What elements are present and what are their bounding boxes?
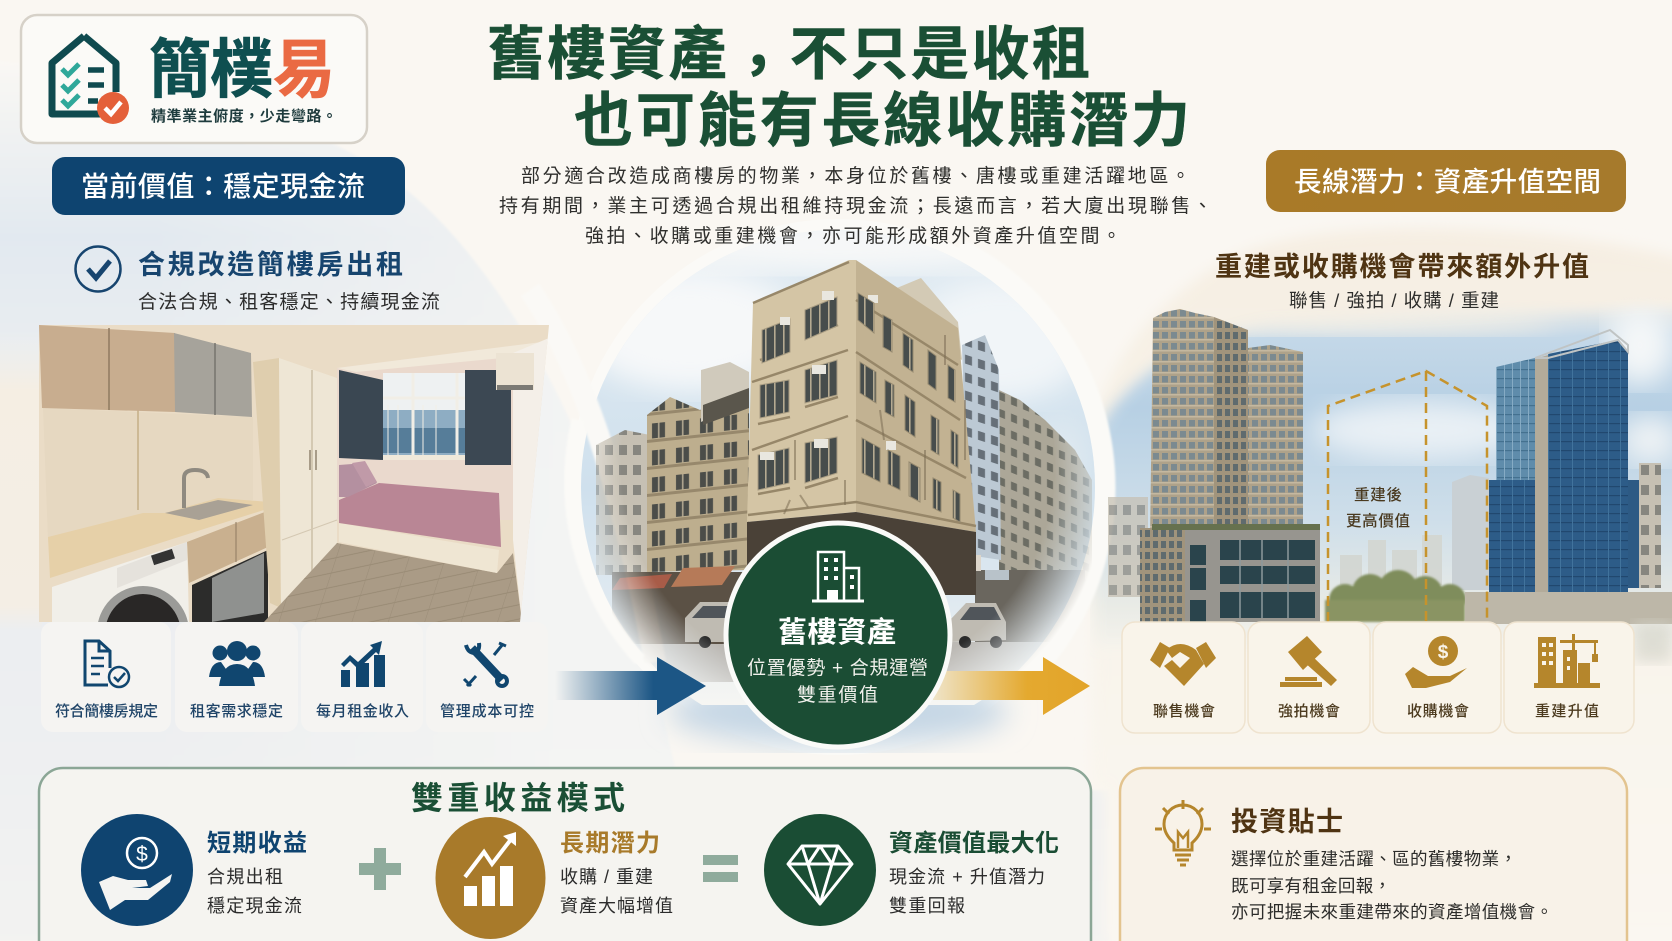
arrow: blue to centre: [555, 657, 706, 715]
card: rent: [301, 622, 423, 732]
logo icon: [52, 36, 129, 124]
centre green circle: [726, 523, 950, 747]
haze strip right of cards: [1634, 622, 1672, 662]
car left: [685, 602, 730, 648]
centre text: 位置優勢 + 合規運營: [747, 657, 928, 679]
card: rebuild value: 重建升值: [1535, 702, 1599, 720]
card: cost: 管理成本可控: [440, 702, 534, 720]
text: long term potential: [560, 830, 673, 916]
curved white band from left panel: [530, 290, 655, 662]
side windows: [858, 293, 960, 522]
right sky backdrop: [1090, 300, 1672, 660]
text: long term potential: 資產大幅增值: [560, 896, 673, 916]
text: long term potential: 長期潛力: [560, 830, 660, 857]
centre heading: 舊樓資產: [778, 616, 896, 649]
tips heading: 投資貼士: [1231, 807, 1343, 837]
heading: compliant rental: [76, 246, 440, 313]
tips text: [1231, 849, 1553, 922]
heading: redevelopment: 聯售 / 強拍 / 收購 / 重建: [1289, 290, 1499, 311]
icon: light bulb: [1155, 800, 1211, 865]
icon: building: [812, 552, 864, 601]
icon: long term potential: [436, 817, 546, 939]
panel heading: 雙重收益模式: [411, 780, 625, 816]
icon: diamond: [764, 814, 876, 926]
card: en bloc sale: 聯售機會: [1153, 703, 1215, 720]
white ring around building: [570, 219, 1106, 755]
card: regulation: 符合簡樓房規定: [55, 702, 158, 720]
ring arc left of building: [571, 420, 640, 660]
heading: redevelopment: [1215, 252, 1589, 311]
card: en bloc sale: [1122, 622, 1245, 733]
ground floor: [747, 512, 976, 595]
icon: check circle: [76, 246, 120, 292]
riverside ground: [1465, 592, 1672, 624]
city photo: [1108, 309, 1672, 662]
text: short term income: [207, 830, 307, 916]
curtains: [339, 370, 383, 460]
right beige background panel: [1090, 228, 1672, 941]
icon: short term income: [81, 814, 193, 926]
dashed future building outline: [1328, 371, 1487, 622]
icon: short term income: $: [136, 843, 148, 866]
brand name: 簡樸易: [149, 34, 335, 106]
title: 不只是收租: [790, 22, 1090, 87]
card: acquisition: $: [1438, 642, 1449, 663]
left feature cards: [41, 622, 548, 732]
tips text: 既可享有租金回報，: [1231, 876, 1391, 896]
left shop building: [647, 385, 749, 572]
pill: current value: [52, 157, 405, 215]
soft blue halo under centre circle: [668, 678, 1008, 746]
card: rebuild value: [1504, 622, 1634, 733]
main building side face: [856, 260, 976, 532]
label: future value: [1346, 486, 1410, 530]
text: short term income: 合規出租: [207, 867, 283, 887]
card: rent: 每月租金收入: [316, 702, 409, 720]
countertop: [48, 498, 270, 578]
plus sign: [359, 848, 401, 890]
title: [487, 22, 1190, 154]
podium building: [1152, 527, 1320, 622]
text: short term income: 穩定現金流: [207, 896, 302, 916]
stains: [784, 335, 965, 514]
panel: investment tips: [1120, 768, 1627, 941]
card: tenants: [175, 622, 298, 732]
alcove wall: [337, 342, 542, 520]
panel: dual income model: [39, 768, 1091, 941]
title: 也可能有長線收購潛力: [574, 88, 1190, 154]
right wall: [513, 338, 549, 622]
title: ，: [729, 34, 787, 99]
pill: long term potential: [1266, 150, 1626, 212]
intro text: [499, 165, 1212, 247]
pill: long term potential: 長線潛力：資產升值空間: [1294, 166, 1601, 197]
air conditioners: [760, 291, 896, 460]
washing machine: [52, 542, 189, 622]
main building front face: [747, 260, 856, 522]
awning left: [671, 566, 735, 587]
tagline: 精準業主俯度，少走彎路。: [151, 107, 337, 125]
wardrobe: [253, 358, 281, 608]
card: compulsory sale: 強拍機會: [1278, 703, 1340, 720]
tips text: 選擇位於重建活躍、區的舊樓物業，: [1231, 849, 1517, 869]
ring arc right of building: [960, 245, 1109, 680]
card: tenants: 租客需求穩定: [190, 702, 283, 720]
heading: redevelopment: 重建或收購機會帶來額外升值: [1215, 252, 1589, 282]
bed: [339, 523, 499, 573]
small right building: [1639, 463, 1661, 588]
text: maximise value: 雙重回報: [889, 896, 965, 916]
room photo: [39, 325, 549, 622]
window: [383, 373, 465, 410]
street: [638, 642, 1040, 682]
card: acquisition: [1373, 622, 1501, 733]
far right buildings: [999, 390, 1092, 590]
distant buildings: [1108, 497, 1148, 597]
blue grey building: [962, 335, 1001, 560]
front windows: [758, 297, 837, 490]
equals sign: [703, 855, 738, 882]
text: maximise value: 現金流 + 升值潛力: [889, 867, 1045, 887]
intro text: 部分適合改造成商樓房的物業，本身位於舊樓、唐樓或重建活躍地區。: [521, 165, 1190, 187]
left tall tower: [1140, 309, 1303, 622]
left blue background panel: [0, 60, 1110, 941]
tips text: 亦可把握未來重建帶來的資產增值機會。: [1231, 902, 1553, 922]
intro text: 強拍、收購或重建機會，亦可能形成額外資產升值空間。: [585, 225, 1121, 247]
ledges: [748, 262, 976, 526]
heading: compliant rental: 合法合規、租客穩定、持續現金流: [138, 291, 440, 313]
air conditioner: [496, 353, 534, 390]
heading: compliant rental: 合規改造簡樓房出租: [138, 250, 403, 280]
old tenement buildings photo: [596, 260, 1092, 682]
car right: [950, 603, 1006, 648]
pill: current value: 當前價值：穩定現金流: [81, 171, 365, 202]
shop sign right: [976, 555, 981, 571]
text: long term potential: 收購 / 重建: [560, 867, 653, 887]
text: maximise value: [889, 829, 1059, 916]
label: future value: 更高價值: [1346, 512, 1410, 530]
centre green circle: 雙重價值: [797, 684, 878, 706]
rear top block: [892, 278, 962, 360]
intro text: 持有期間，業主可透過合規出租維持現金流；長遠而言，若大廈出現聯售、: [499, 195, 1212, 217]
kitchen backsplash: [43, 408, 253, 540]
lower cabinets: [187, 510, 270, 583]
card: compulsory sale: [1248, 622, 1370, 733]
text: short term income: 短期收益: [207, 830, 307, 857]
shops row: [612, 572, 750, 644]
card: cost: [426, 622, 548, 732]
logo card: [21, 15, 367, 143]
arrow: gold from centre: [933, 657, 1090, 715]
floor: [264, 543, 522, 622]
card: regulation: [41, 622, 171, 732]
card: acquisition: 收購機會: [1407, 702, 1469, 720]
right glass tower: [1489, 330, 1639, 592]
title: 舊樓資產: [487, 22, 727, 87]
sky circle: [570, 219, 1110, 705]
text: maximise value: 資產價值最大化: [889, 829, 1059, 857]
far left building: [596, 430, 652, 575]
left rooftop block: [701, 362, 749, 422]
fridge: [192, 550, 268, 622]
label: future value: 重建後: [1354, 486, 1402, 504]
left cream strip beside room photo: [0, 330, 42, 630]
right feature cards: [1122, 622, 1634, 733]
central building vignette: [581, 230, 1104, 753]
garden trees: [1325, 570, 1466, 622]
